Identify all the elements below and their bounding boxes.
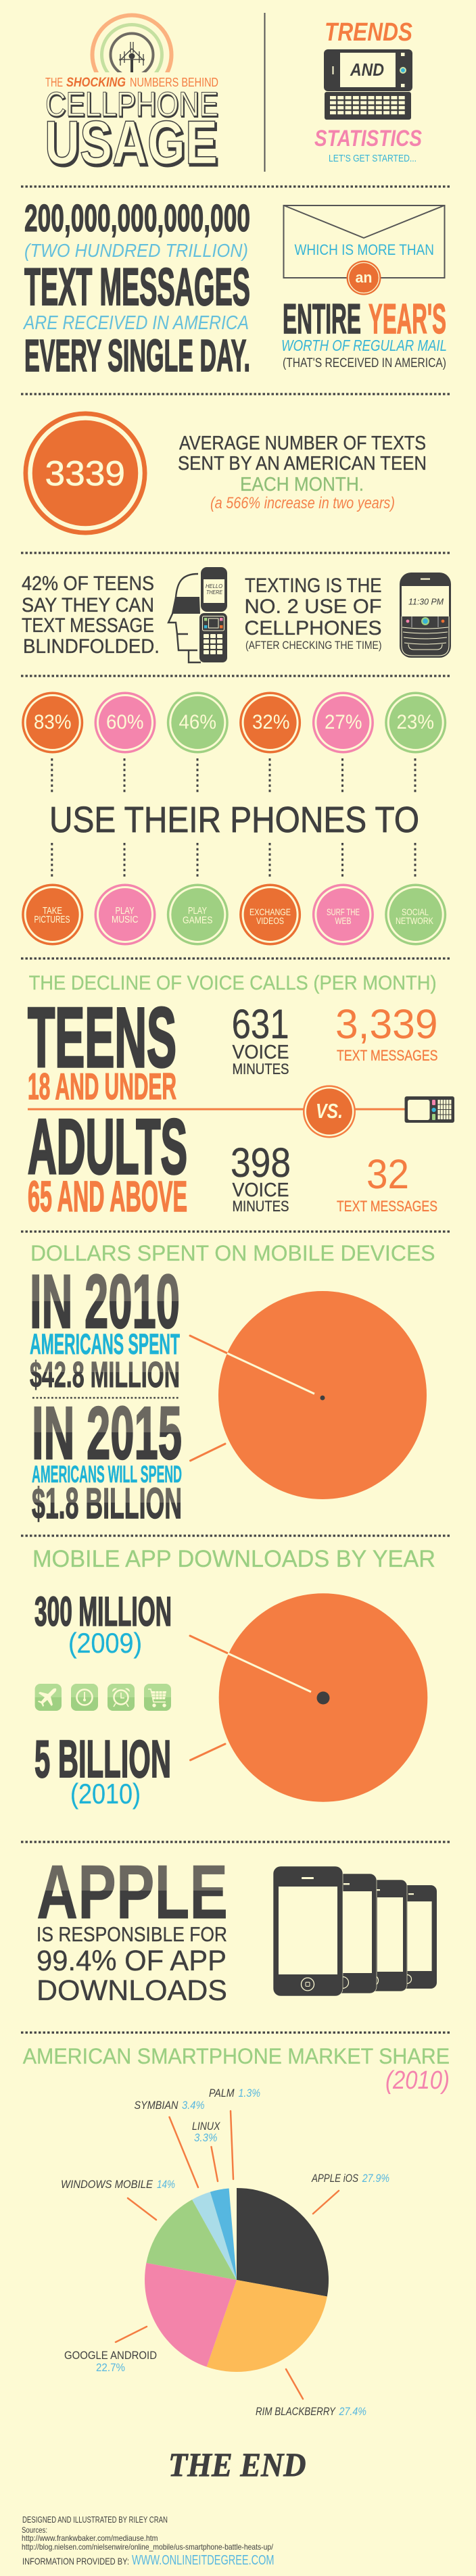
stat: teen text messages: TEXT MESSAGES [337, 1047, 438, 1064]
title: usage: USAGE [46, 111, 219, 179]
label: symbian: 3.4% [182, 2099, 205, 2112]
average texts copy: (a 566% increase in two years) [210, 494, 395, 512]
icon: cell tower with signal arcs [91, 14, 173, 72]
apple copy: DOWNLOADS [37, 1974, 227, 2007]
panel: header title [45, 13, 422, 179]
label: surf the web [312, 884, 374, 945]
label: social network [385, 884, 446, 945]
panel: decline of voice calls [28, 972, 454, 1221]
icon: airplane app [35, 1684, 62, 1711]
apple copy [37, 1922, 227, 2007]
icon: alarm clock app [108, 1684, 135, 1711]
blindfolded copy: 42% OF TEENS [22, 573, 154, 595]
stat: adult text messages: 32 [366, 1151, 409, 1197]
icon: gauge app [71, 1684, 98, 1711]
stat: adult voice minutes: 398 [231, 1140, 291, 1186]
icon: horizontal phone [404, 1096, 454, 1123]
label: play music: PLAY [115, 906, 135, 917]
blindfolded copy: SAY THEY CAN [22, 594, 154, 616]
big number: 200,000,000,000,000 [24, 197, 250, 240]
badge: 3339 [23, 411, 147, 535]
tagline: SHOCKING [66, 76, 126, 90]
stat: 60%: 60% [106, 711, 143, 733]
stat: teen voice minutes: VOICE [233, 1042, 289, 1063]
texting copy [245, 575, 381, 652]
the end: THE END [168, 2446, 306, 2483]
badge: an: an [356, 269, 372, 286]
panel: apple app downloads [37, 1849, 437, 2007]
title: cellphone: CELLPHONE [46, 86, 219, 124]
stat: teen voice minutes [232, 1001, 289, 1077]
label: take pictures: TAKE [43, 906, 62, 917]
label: symbian: SYMBIAN [134, 2099, 178, 2112]
in 2010: IN 2010 [30, 1259, 180, 1344]
label: google android: 22.7% [96, 2361, 125, 2374]
icon: envelope [284, 205, 445, 278]
stat: 46%: 46% [178, 711, 216, 733]
label: apple ios: 27.9% [362, 2172, 389, 2185]
stat: teen voice minutes: MINUTES [233, 1061, 289, 1077]
americans will spend: AMERICANS WILL SPEND [32, 1461, 182, 1488]
stat: adult text messages [337, 1151, 437, 1215]
texting copy: NO. 2 USE OF [245, 596, 381, 618]
1.8 billion: $1.8 BILLION [32, 1479, 182, 1528]
badge: vs [303, 1086, 356, 1138]
leader lines [116, 2111, 339, 2399]
label: windows mobile: 14% [157, 2178, 175, 2191]
icon: slider phone: AND [350, 59, 384, 80]
panel: envelope comparison [281, 205, 447, 370]
title: cellphone: CELLPHONE [45, 85, 218, 123]
tagline: NUMBERS BEHIND [130, 76, 218, 89]
5 billion: 5 BILLION [34, 1729, 171, 1789]
panel: dollars spent on mobile devices [30, 1241, 435, 1528]
stat: adult voice minutes: VOICE [233, 1180, 289, 1201]
stat: teen text messages: 3,339 [335, 1001, 438, 1047]
credits and sources: Sources: [22, 2525, 47, 2535]
label: play music: MUSIC [112, 915, 138, 925]
label: exchange videos [239, 884, 301, 945]
icon: shrinking iphones [273, 1866, 437, 1996]
stat: 23% [385, 692, 446, 753]
label: play games: GAMES [183, 915, 212, 926]
year 2009: (2009) [68, 1627, 142, 1659]
label: social network: NETWORK [396, 915, 434, 926]
label: play music [95, 884, 156, 945]
label: play games [167, 884, 229, 945]
label: palm: PALM [209, 2087, 235, 2099]
chart: proportional circles for spending [190, 1291, 427, 1499]
heading: dollars spent: DOLLARS SPENT ON MOBILE DEVICES [30, 1241, 435, 1265]
label: google android [64, 2349, 157, 2374]
stat: 83% [22, 692, 83, 753]
average texts copy: SENT BY AN AMERICAN TEEN [178, 453, 427, 475]
tagline [45, 76, 218, 90]
65 and above: 65 AND ABOVE [28, 1172, 187, 1221]
icon: blindfolded head with flip phone: THERE [206, 589, 223, 596]
label: apple ios: APPLE iOS [311, 2172, 359, 2185]
stat: 60% [95, 692, 156, 753]
icon: smartphone showing the time [400, 573, 451, 658]
label: play games: PLAY [188, 906, 207, 917]
42.8 million: $42.8 MILLION [30, 1355, 180, 1395]
label: social network: SOCIAL [402, 906, 429, 917]
label: rim blackberry: RIM BLACKBERRY [256, 2405, 336, 2418]
18 and under: 18 AND UNDER [28, 1065, 176, 1107]
label: palm [209, 2087, 260, 2099]
chart: proportional circles for downloads [190, 1593, 427, 1802]
stat: 46% [167, 692, 229, 753]
icon: blindfolded head with flip phone: HELLO [206, 583, 222, 589]
stat: 27%: 27% [325, 711, 362, 733]
badge: vs: VS. [316, 1099, 343, 1123]
label: linux [192, 2120, 220, 2144]
adults: ADULTS [28, 1104, 187, 1190]
badge: an [346, 261, 381, 295]
received in america note: (THAT'S RECEIVED IN AMERICA) [283, 356, 446, 370]
heading: app downloads: MOBILE APP DOWNLOADS BY YEAR [32, 1546, 435, 1572]
label: surf the web: WEB [335, 915, 352, 926]
label: exchange videos: VIDEOS [256, 915, 284, 926]
which is more than: WHICH IS MORE THAN [295, 241, 434, 258]
texting copy: CELLPHONES [245, 617, 381, 639]
panel: average texts [23, 411, 427, 535]
credits and sources: INFORMATION PROVIDED BY: [22, 2556, 129, 2567]
label: surf the web: SURF THE [327, 906, 360, 917]
label: windows mobile: WINDOWS MOBILE [61, 2178, 153, 2191]
blindfolded copy [22, 573, 160, 658]
heading: use their phones to: USE THEIR PHONES TO [49, 800, 419, 840]
300 million: 300 MILLION [34, 1588, 172, 1634]
panel: american smartphone market share [23, 2044, 450, 2418]
texting copy: (AFTER CHECKING THE TIME) [245, 639, 381, 652]
credits and sources: http://www.frankwbaker.com/mediause.htm [22, 2533, 158, 2543]
word: statistics: STATISTICS [314, 126, 422, 151]
panel: mobile app downloads [32, 1546, 435, 1809]
apple copy: IS RESPONSIBLE FOR [37, 1922, 227, 1946]
heading: decline of voice calls: THE DECLINE OF VOICE CALLS (PER MONTH) [29, 972, 437, 994]
texting copy: TEXTING IS THE [245, 575, 381, 597]
pie chart [145, 2188, 329, 2372]
credits and sources: DESIGNED AND ILLUSTRATED BY RILEY CRAN [22, 2515, 168, 2525]
year 2010: (2010) [70, 1778, 141, 1809]
in 2015: IN 2015 [32, 1392, 182, 1475]
stat: teen voice minutes: 631 [232, 1001, 289, 1047]
every single day: EVERY SINGLE DAY. [24, 331, 250, 381]
stat: 32% [239, 692, 301, 753]
americans spent: AMERICANS SPENT [30, 1328, 180, 1361]
tagline: THE [45, 76, 63, 89]
icon: blindfolded head with flip phone [168, 567, 227, 662]
label: google android: GOOGLE ANDROID [64, 2349, 157, 2362]
label: palm: 1.3% [238, 2087, 260, 2099]
icon: smartphone showing the time: 11:30 PM [408, 598, 444, 607]
teens: TEENS [28, 991, 176, 1085]
icon: slider phone [324, 49, 412, 120]
label: take pictures [22, 884, 83, 945]
credits and sources [22, 2515, 275, 2568]
blindfolded copy: BLINDFOLDED. [23, 635, 160, 658]
apple copy: 99.4% OF APP [37, 1945, 227, 1977]
panel: what teens use their phones to do [22, 692, 446, 945]
label: linux: LINUX [192, 2120, 220, 2133]
label: rim blackberry: 27.4% [339, 2405, 366, 2418]
heading: market share: AMERICAN SMARTPHONE MARKET SHARE [23, 2044, 450, 2068]
entire year's: ENTIRE [283, 296, 361, 343]
year 2010: (2010) [385, 2066, 450, 2095]
stat: 83%: 83% [34, 711, 72, 733]
two hundred trillion: (TWO HUNDRED TRILLION) [24, 240, 248, 261]
credits and sources: WWW.ONLINEITDEGREE.COM [132, 2553, 275, 2568]
stat: adult text messages: TEXT MESSAGES [337, 1198, 437, 1215]
panel: blindfolded and number two use [22, 567, 451, 662]
text messages: TEXT MESSAGES [24, 257, 250, 316]
label: linux: 3.3% [194, 2131, 218, 2144]
panel: two hundred trillion text messages [22, 197, 250, 381]
stat: adult voice minutes [231, 1140, 291, 1215]
average texts copy: AVERAGE NUMBER OF TEXTS [179, 433, 426, 454]
word: trends: TRENDS [325, 18, 412, 47]
stat: 32%: 32% [252, 711, 289, 733]
stat: adult voice minutes: MINUTES [233, 1198, 289, 1215]
label: take pictures: PICTURES [34, 915, 70, 925]
title: usage: USAGE [45, 109, 218, 177]
average texts copy: EACH MONTH. [240, 474, 364, 495]
stat: 27% [312, 692, 374, 753]
icon: shopping cart app [144, 1684, 171, 1711]
apple: APPLE [37, 1849, 228, 1935]
received in america: ARE RECEIVED IN AMERICA [22, 312, 249, 334]
lets get started: LET'S GET STARTED... [329, 153, 416, 164]
blindfolded copy: TEXT MESSAGE [22, 614, 154, 637]
badge: 3339: 3339 [45, 454, 125, 493]
average texts copy [178, 433, 427, 512]
credits and sources: http://blog.nielsen.com/nielsenwire/online_mobile/us-smartphone-battle-heats-up/ [22, 2542, 274, 2552]
versus connector line [28, 1109, 406, 1110]
stat: 23%: 23% [396, 711, 434, 733]
label: exchange videos: EXCHANGE [249, 906, 291, 917]
